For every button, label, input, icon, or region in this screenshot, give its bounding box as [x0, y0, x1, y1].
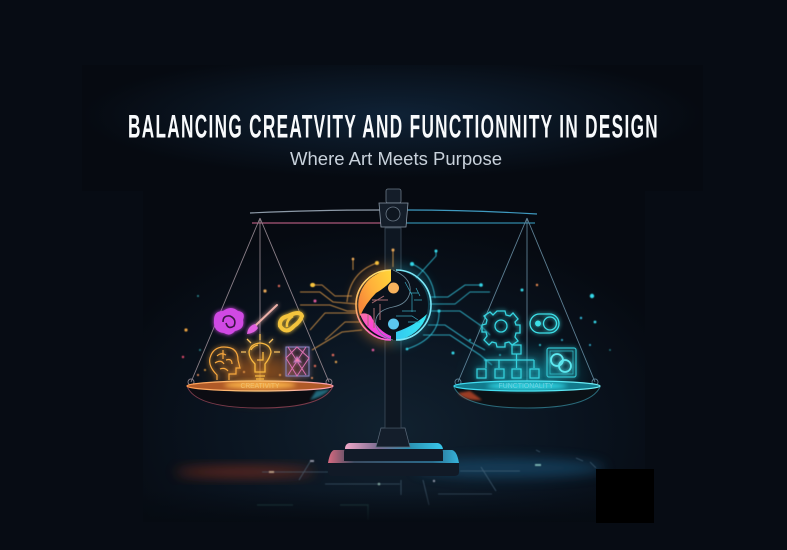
label: functionality: FUNCTIONALITY	[498, 383, 554, 390]
lower plate	[328, 450, 459, 476]
dark interior	[358, 270, 428, 340]
floor circuit lines	[257, 450, 596, 520]
functionality pan	[454, 381, 600, 408]
floor glow	[175, 458, 605, 478]
pivot housing	[379, 189, 408, 227]
right hanger	[455, 218, 598, 385]
dots	[388, 282, 399, 294]
subtitle: Where Art Meets Purpose	[290, 148, 502, 169]
icon: geometric frame	[286, 347, 309, 376]
icon: brain head	[210, 347, 240, 380]
scale base	[328, 428, 459, 476]
scale beam	[250, 210, 537, 223]
icon: gear	[482, 311, 520, 347]
left hanger	[188, 218, 332, 385]
collar	[376, 428, 410, 447]
label: creativity: CREATIVITY	[240, 383, 280, 390]
icon: swirl blob	[214, 308, 244, 335]
icon: flow chart	[477, 345, 539, 378]
icon: toggle switch	[530, 314, 559, 333]
warm half	[358, 270, 391, 316]
creativity pan	[187, 381, 333, 408]
icon: curl	[280, 313, 302, 330]
circuit nodes	[311, 248, 454, 356]
functionality glow	[477, 360, 577, 388]
upper plate	[344, 443, 443, 461]
black square patch	[596, 469, 654, 523]
sparkle particles	[182, 283, 611, 385]
creativity glow	[218, 356, 302, 388]
yin-yang emblem	[353, 265, 433, 345]
icon: light bulb	[241, 334, 280, 379]
header panel	[82, 65, 703, 191]
circuit traces left	[300, 250, 393, 350]
icon: paintbrush	[247, 305, 277, 334]
icon: linked circles panel	[547, 348, 576, 377]
cool half	[396, 314, 427, 340]
bottom fade	[143, 490, 645, 522]
scale column	[385, 228, 401, 428]
main illustration panel	[143, 190, 645, 522]
circuit traces right	[407, 251, 492, 365]
